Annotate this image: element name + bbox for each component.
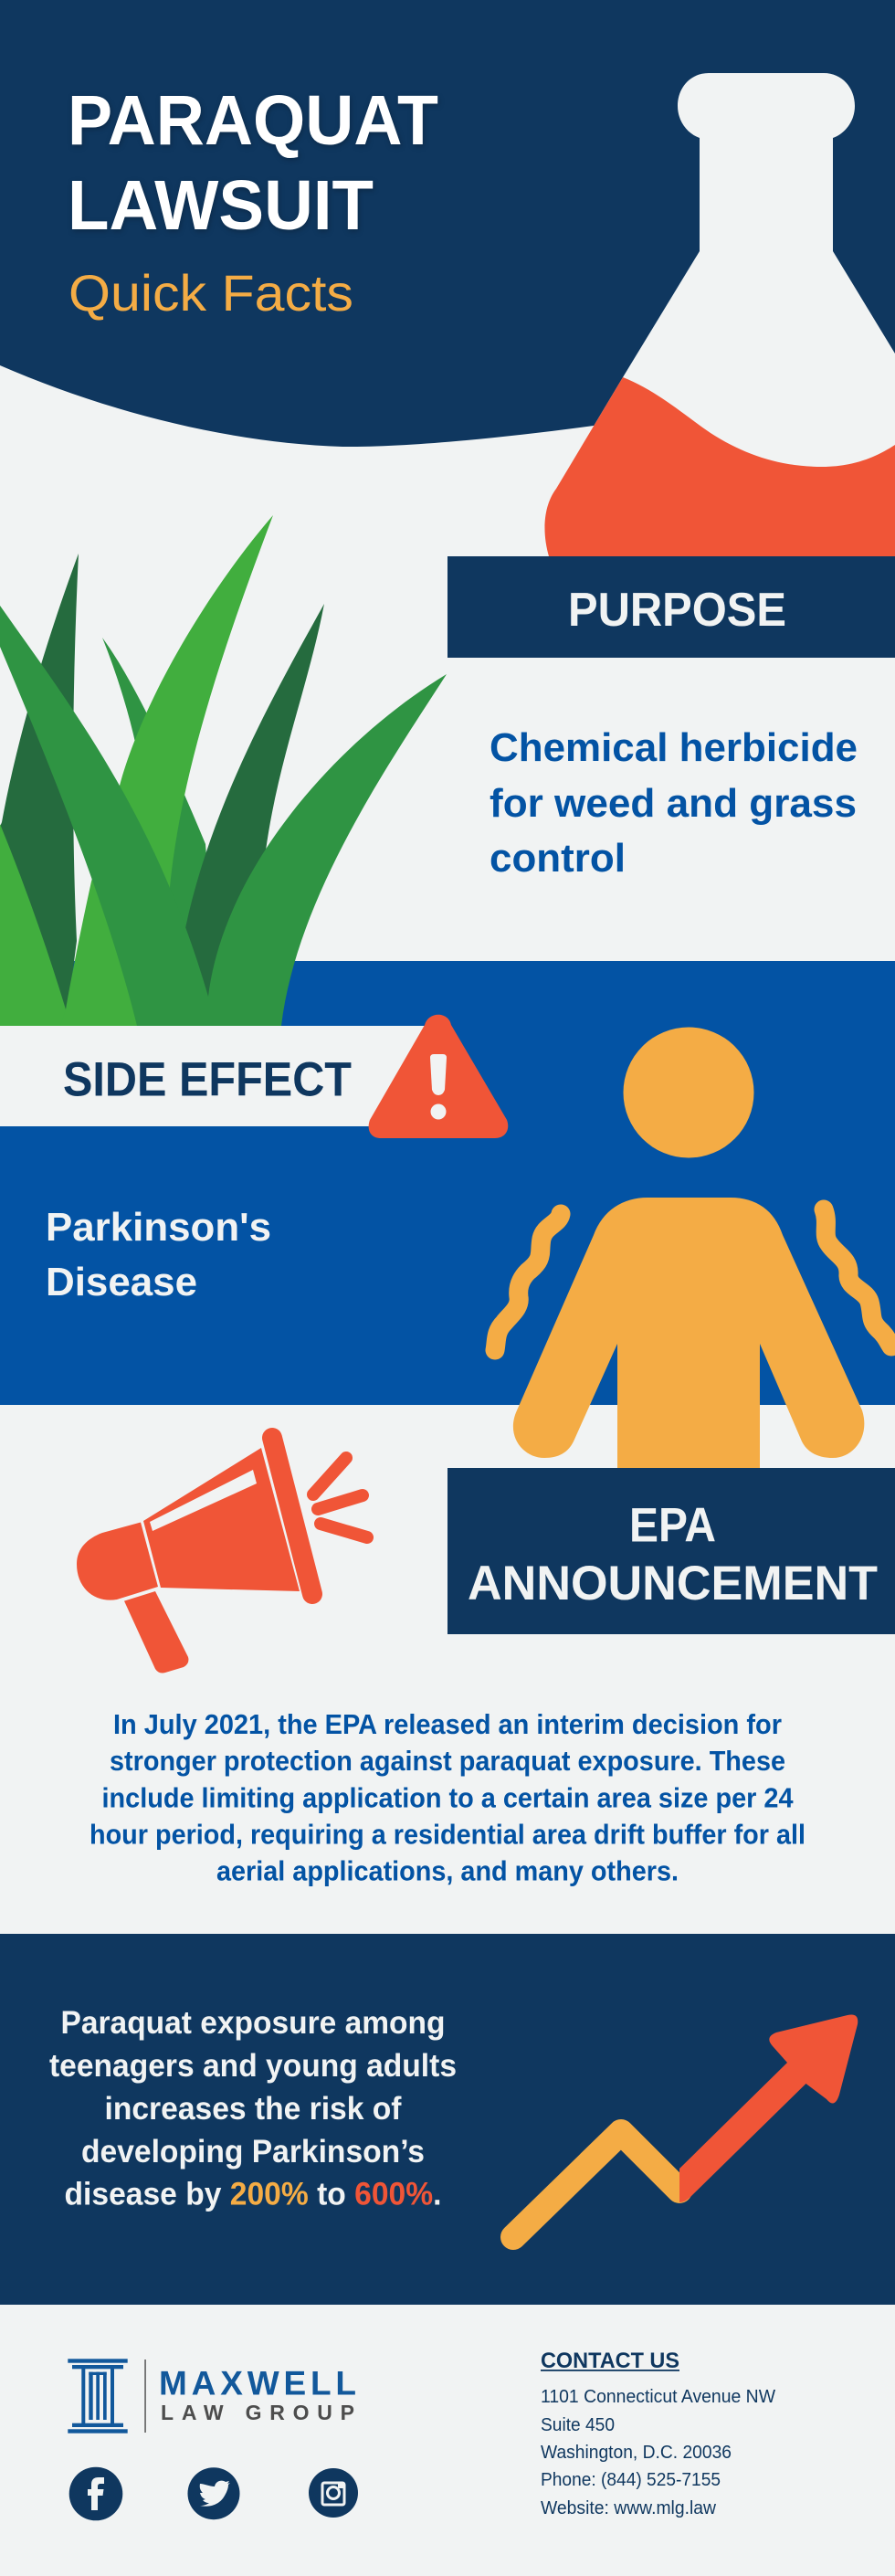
illustration: grass [0,515,447,1026]
panel: statistic band [0,1934,895,2305]
text: epa description: In July 2021, the EPA released an interim decision for [113,1708,782,1740]
panel: purpose [448,556,895,658]
text: parkinson's disease: Parkinson's [46,1205,271,1250]
icon: twitter [188,2467,239,2519]
logo: maxwell law group: LAW GROUP [161,2401,354,2424]
title: PARAQUAT [68,81,438,160]
text: purpose description [490,725,858,881]
heading: purpose: PURPOSE [568,584,786,637]
text: epa description: stronger protection against paraquat exposure. These [110,1745,785,1777]
text: parkinson's disease [46,1205,271,1304]
icon: shaking person [495,1027,891,1471]
subtitle: Quick Facts [68,264,353,322]
text: contact us: Suite 450 [541,2415,615,2435]
icon: flask [544,73,895,556]
panel: epa announcement heading: ANNOUNCEMENT [468,1557,878,1610]
text: purpose description: control [490,836,626,881]
title: LAWSUIT [68,166,374,245]
text: parkinson's disease: Disease [46,1260,197,1304]
logo: maxwell law group: MAXWELL [159,2365,356,2402]
text: statistic: developing Parkinson’s [81,2133,425,2170]
icon: rising arrow [513,2014,858,2237]
text: statistic: disease by 200% to 600%. [65,2176,441,2212]
panel: epa announcement heading: EPA [629,1498,716,1553]
text: statistic: Paraquat exposure among [60,2004,446,2041]
panel: side effect band [0,961,895,1405]
text: contact us: Phone: (844) 525-7155 [541,2470,721,2490]
text: contact us: Website: www.mlg.law [541,2498,717,2518]
panel: epa announcement heading [448,1468,895,1634]
text: contact us: Washington, D.C. 20036 [541,2443,732,2463]
text: contact us: CONTACT US [541,2349,679,2373]
text: contact us [541,2349,775,2518]
text: statistic: increases the risk of [104,2090,402,2127]
text: epa description: aerial applications, and many others. [216,1854,679,1887]
title [68,81,438,245]
heading: side effect: SIDE EFFECT [63,1052,352,1107]
logo: maxwell law group [68,2359,356,2433]
text: epa description: include limiting application to a certain area size per 24 [102,1781,794,1814]
header wave background [0,0,895,447]
text: epa description: hour period, requiring a residential area drift buffer for all [90,1818,806,1851]
text: contact us: 1101 Connecticut Avenue NW [541,2387,775,2407]
icon: warning triangle [369,1015,508,1138]
heading: side effect [0,1026,429,1126]
icon: megaphone [77,1438,367,1673]
text: statistic [49,2004,457,2212]
text: purpose description: Chemical herbicide [490,725,858,770]
text: statistic: teenagers and young adults [49,2047,457,2084]
text: purpose description: for weed and grass [490,781,857,826]
text: epa description [90,1708,806,1887]
icon: facebook [69,2467,122,2520]
icon: instagram [309,2468,358,2518]
